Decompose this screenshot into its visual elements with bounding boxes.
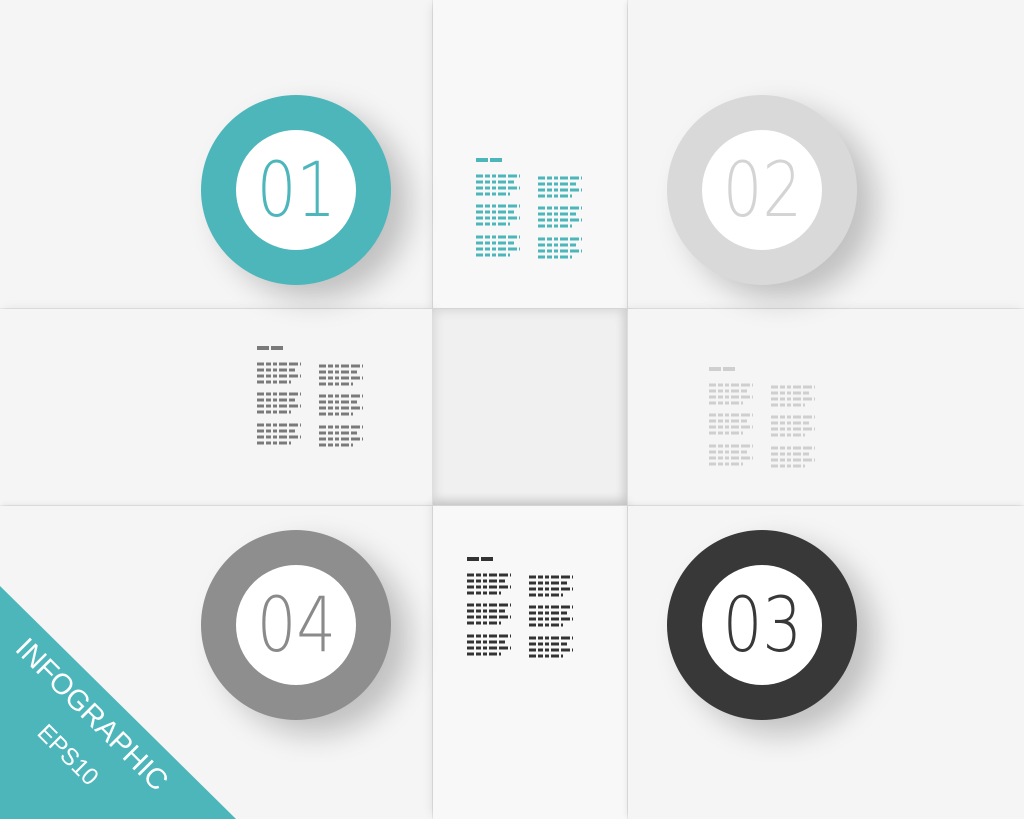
corner banner: EPS10 bbox=[32, 719, 104, 791]
text block light bbox=[709, 367, 815, 468]
text block gray bbox=[257, 346, 363, 446]
circle 01 bbox=[201, 95, 391, 285]
circle 02 bbox=[667, 95, 857, 285]
corner banner: INFOGRAPHIC bbox=[9, 632, 174, 797]
corner banner bbox=[0, 586, 236, 819]
text block dark bbox=[467, 557, 573, 658]
circle 02: 02 bbox=[722, 145, 802, 234]
circle 01: 01 bbox=[256, 145, 336, 234]
circle 04: 04 bbox=[256, 580, 336, 669]
circle 04 bbox=[201, 530, 391, 720]
circle 03 bbox=[667, 530, 857, 720]
circle 03: 03 bbox=[722, 580, 802, 669]
text block teal bbox=[476, 158, 582, 258]
